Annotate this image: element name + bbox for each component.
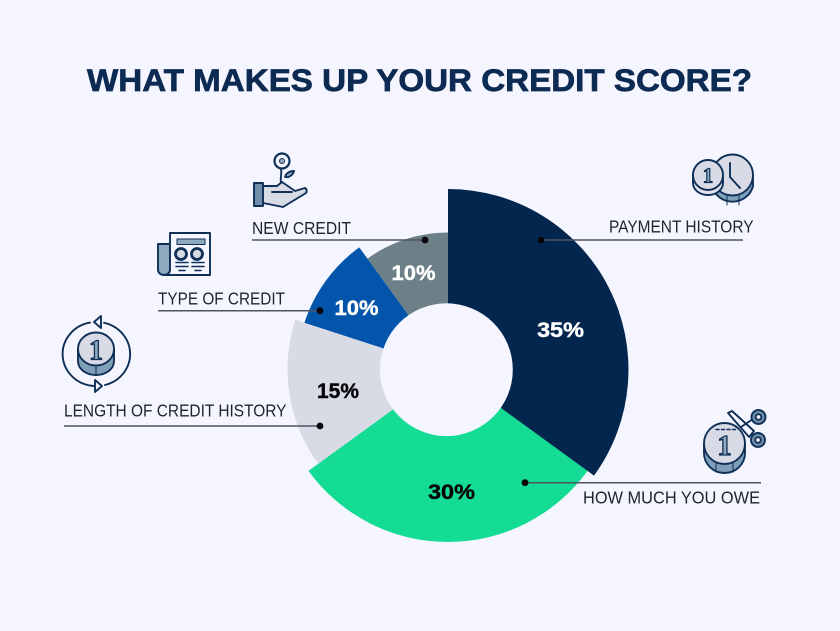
segment: how much you owe 30%: [308, 370, 588, 542]
segment: length of credit history 15%: [287, 320, 448, 464]
segment: new credit 10%: [367, 232, 448, 370]
value: 35%: 35%: [537, 319, 584, 342]
donut hole: [380, 303, 513, 436]
label: how much you owe: HOW MUCH YOU OWE: [583, 488, 760, 508]
segment: payment history 35%: [448, 189, 628, 476]
value: 15%: 15%: [317, 380, 359, 403]
icon: newspaper: [158, 233, 210, 275]
label: type of credit: [158, 288, 323, 314]
value: 10% new credit: 10%: [392, 262, 436, 285]
label: payment history: [538, 217, 754, 243]
label: length of credit history: LENGTH OF CREDIT HISTORY: [64, 401, 287, 421]
label: how much you owe: [522, 479, 761, 508]
title: WHAT MAKES UP YOUR CREDIT SCORE?: [87, 62, 752, 98]
value: 10% type of credit: 10%: [334, 297, 379, 320]
value: 30%: 30%: [428, 481, 475, 504]
icon: coin with circular arrows: 1: [89, 336, 103, 366]
label: new credit: [252, 218, 428, 243]
icon: coin and clock: [693, 154, 753, 205]
icon: coin and clock: 1: [703, 164, 713, 188]
segment: type of credit 10%: [304, 247, 448, 370]
label: new credit: NEW CREDIT: [252, 218, 351, 238]
label: payment history: PAYMENT HISTORY: [609, 217, 754, 237]
icon: coin and scissors: [704, 410, 766, 473]
icon: hand with coin plant: [254, 154, 307, 207]
label: length of credit history: [64, 401, 323, 429]
icon: coin with circular arrows: [63, 316, 130, 392]
label: type of credit: TYPE OF CREDIT: [158, 288, 285, 308]
icon: coin and scissors: 1: [717, 430, 732, 462]
donut chart: [287, 189, 628, 542]
